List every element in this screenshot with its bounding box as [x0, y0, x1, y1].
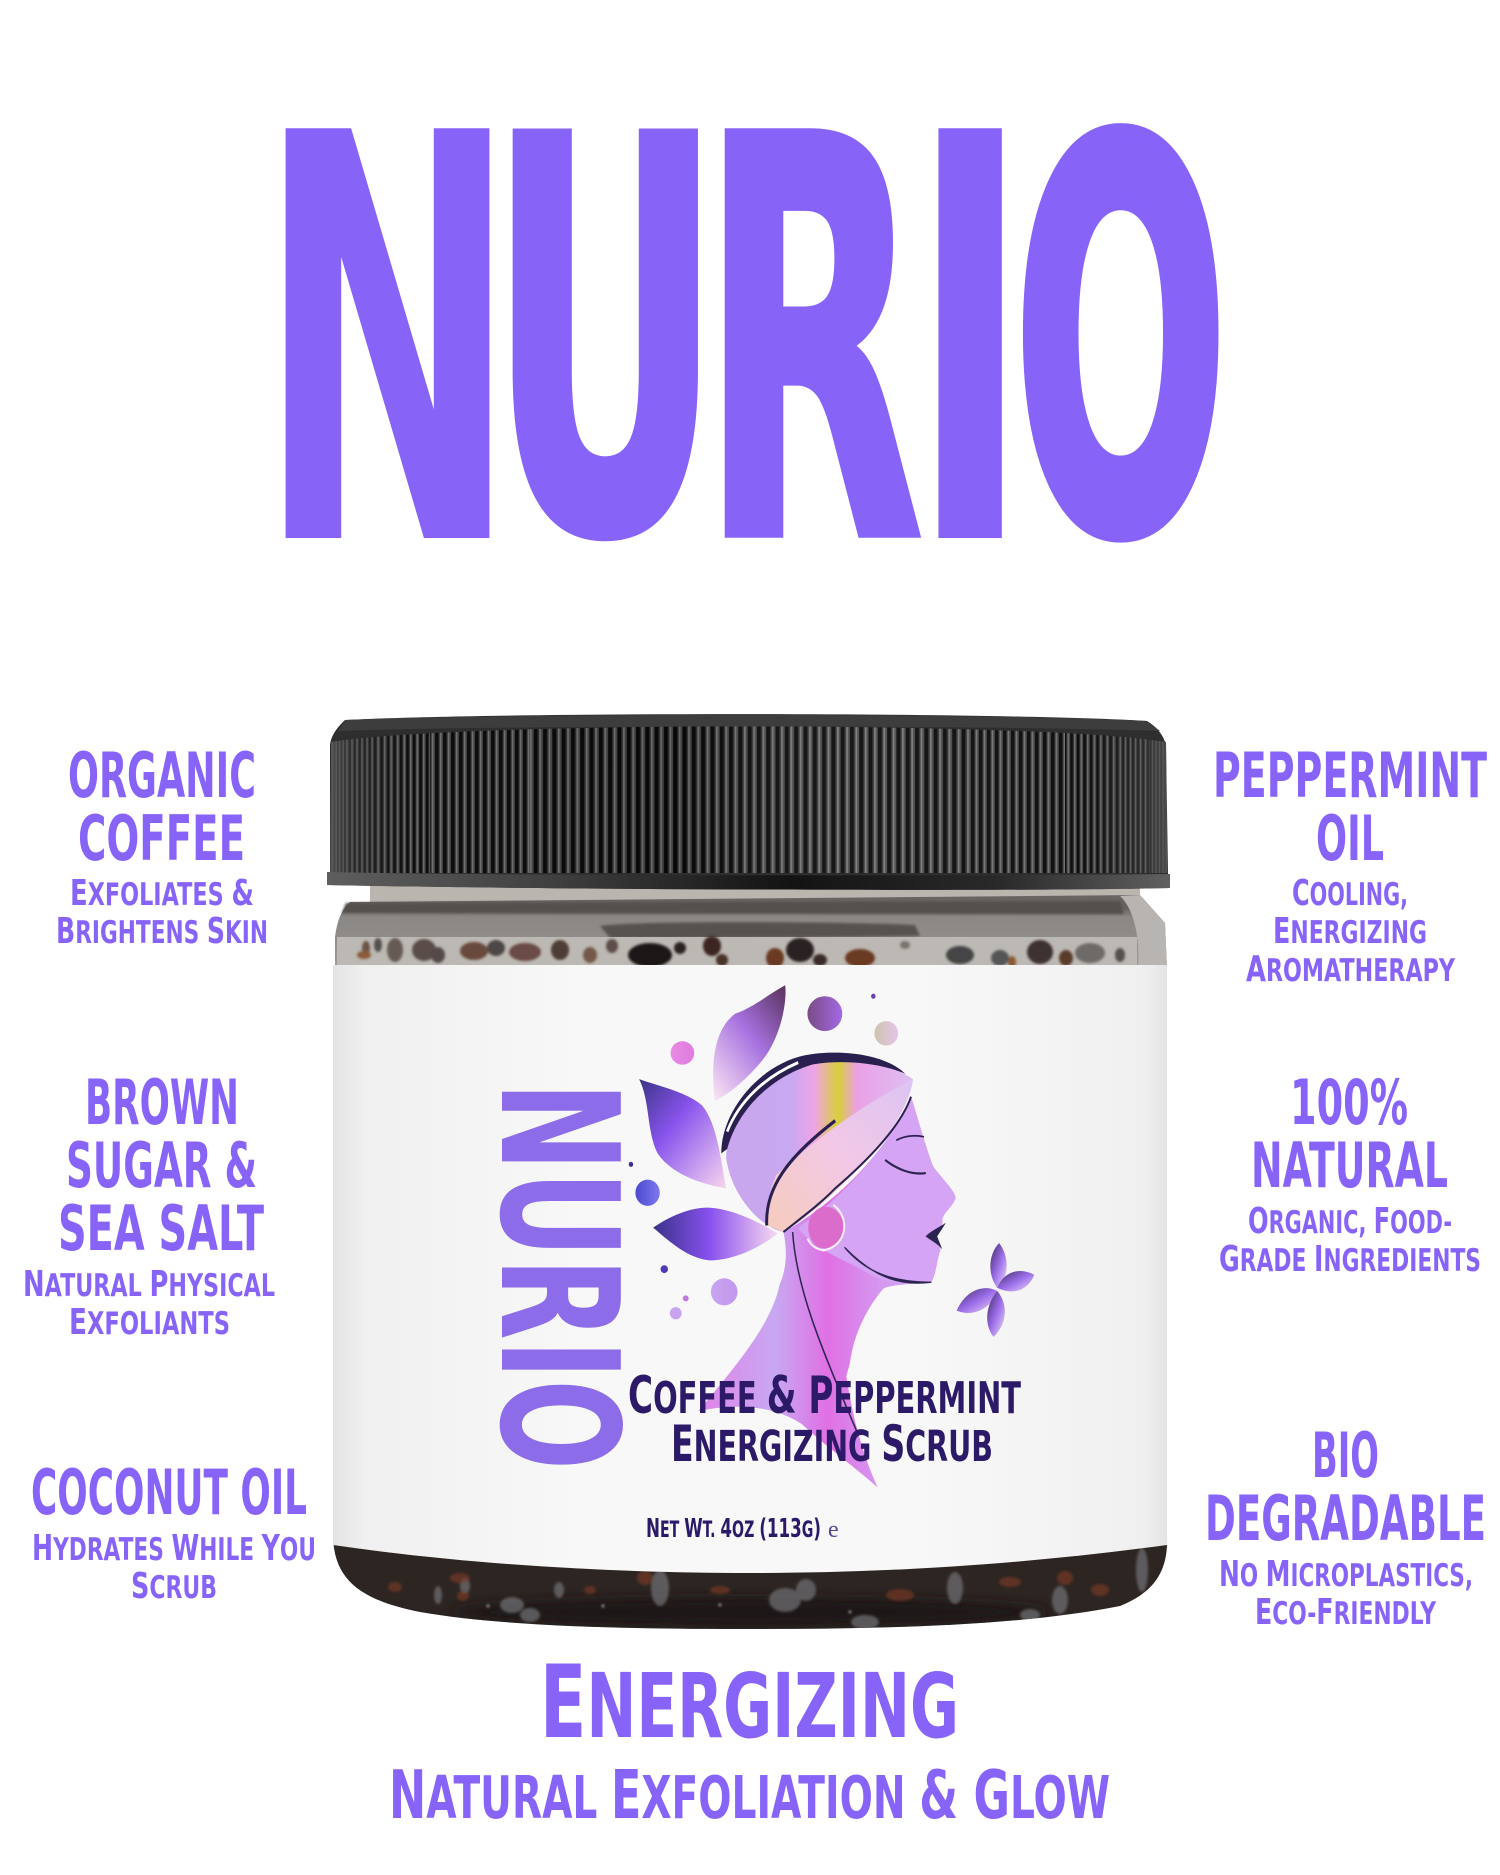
title: NURIO: N	[257, 17, 518, 672]
callout: peppermint oil: COOLING,	[1292, 873, 1408, 914]
callout: peppermint oil: ENERGIZING	[1273, 911, 1427, 952]
bottom subheadline: NATURAL EXFOLIATION & GLOW	[389, 1756, 1110, 1834]
label net weight: NET WT. 4OZ (113G)	[646, 1514, 821, 1544]
logo leaves	[639, 985, 786, 1260]
callout: brown sugar and sea salt: EXFOLIANTS	[69, 1302, 230, 1343]
bottom headline	[389, 1643, 1110, 1834]
label product name: COFFEE & PEPPERMINT	[628, 1366, 1021, 1426]
logo earring	[807, 1205, 844, 1250]
label product name: ENERGIZING SCRUB	[671, 1415, 993, 1473]
jar scrub bottom	[333, 1538, 1167, 1629]
callout: coconut oil: SCRUB	[131, 1566, 217, 1607]
callout: coconut oil: HYDRATES WHILE YOU	[32, 1528, 316, 1569]
callout: coconut oil: COCONUT OIL	[31, 1456, 307, 1529]
jar label	[333, 965, 1167, 1573]
callout: organic coffee: EXFOLIATES &	[70, 873, 254, 914]
callout: organic coffee: COFFEE	[78, 802, 245, 875]
callout: brown sugar and sea salt: BROWN	[85, 1066, 239, 1139]
callout: biodegradable	[1205, 1419, 1486, 1633]
callout: organic coffee: BRIGHTENS SKIN	[56, 911, 268, 952]
label vertical brand name: NURIO	[463, 1082, 652, 1470]
callout: brown sugar and sea salt: NATURAL PHYSICAL	[23, 1264, 275, 1305]
callout: brown sugar and sea salt: SUGAR &	[66, 1129, 257, 1202]
callout: 100% natural: ORGANIC, FOOD-	[1248, 1201, 1452, 1242]
callout: 100% natural	[1219, 1066, 1481, 1280]
logo facial features	[793, 1136, 945, 1433]
label net weight: e	[828, 1517, 839, 1543]
logo turban	[721, 1053, 913, 1232]
title: NURIO	[257, 17, 1228, 672]
title: NURIO: I	[908, 18, 1033, 671]
callout: biodegradable: BIO	[1312, 1419, 1379, 1492]
logo butterfly	[957, 1243, 1034, 1337]
title: NURIO: O	[1014, 30, 1228, 655]
callout: peppermint oil	[1213, 739, 1487, 990]
title: NURIO: R	[700, 22, 924, 664]
callout: 100% natural: 100%	[1290, 1066, 1408, 1139]
callout: biodegradable: ECO-FRIENDLY	[1255, 1592, 1436, 1633]
jar lid	[327, 714, 1170, 890]
title: NURIO: U	[489, 27, 722, 657]
logo face and neck	[698, 1097, 956, 1487]
callout: coconut oil	[31, 1456, 316, 1607]
callout: peppermint oil: OIL	[1316, 802, 1384, 875]
bottom headline: ENERGIZING	[540, 1643, 959, 1761]
label product name	[628, 1366, 1021, 1473]
logo: woman with leaves	[629, 985, 1034, 1487]
product jar	[327, 714, 1170, 1629]
logo dots	[629, 994, 898, 1319]
callout: organic coffee: ORGANIC	[68, 739, 256, 812]
callout: organic coffee	[56, 739, 268, 952]
jar glass shoulder with scrub	[335, 884, 1167, 968]
callout: brown sugar and sea salt: SEA SALT	[58, 1192, 264, 1265]
callout: brown sugar and sea salt	[23, 1066, 275, 1343]
